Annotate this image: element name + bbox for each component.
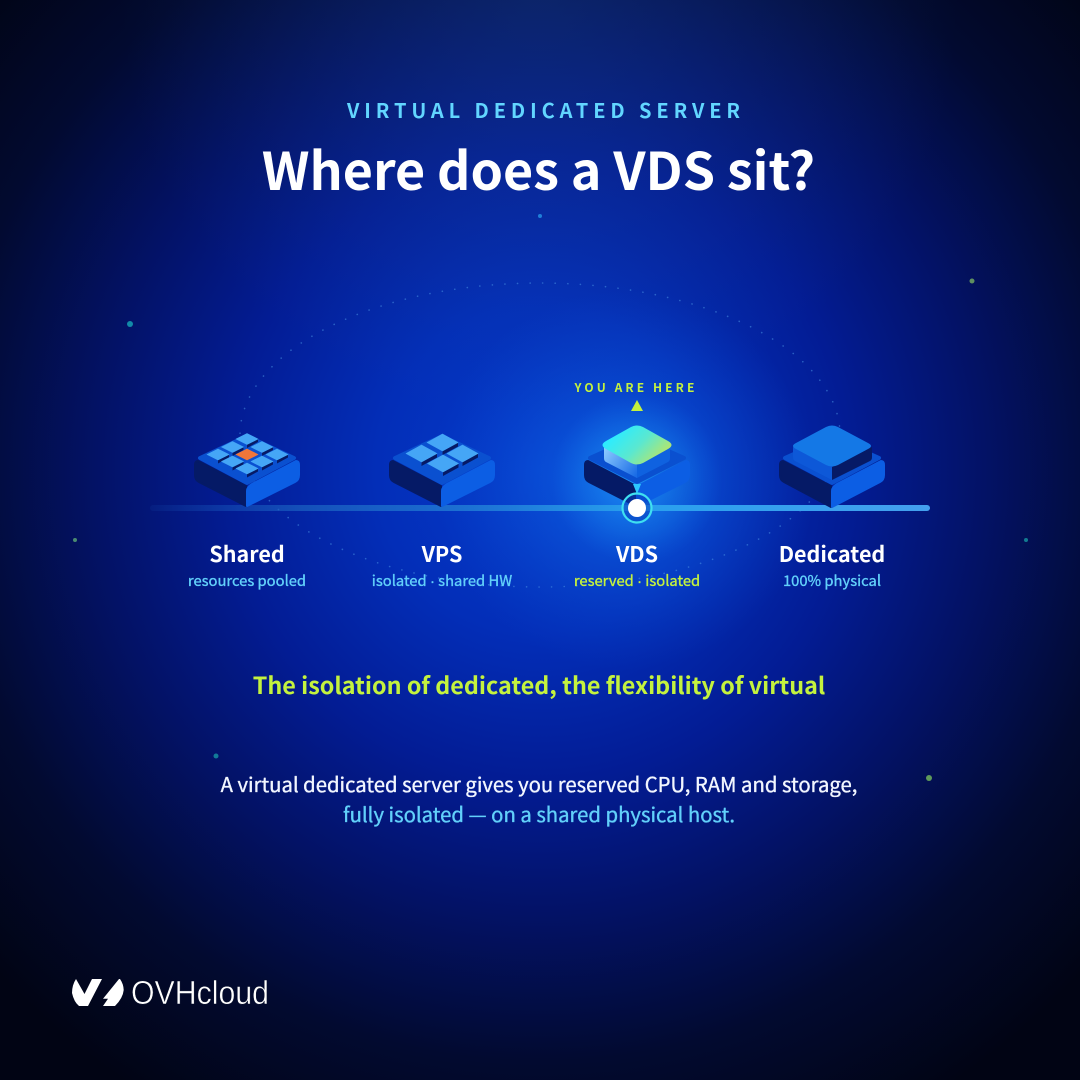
label: dedicated: 100% physical (783, 570, 881, 591)
label: shared: resources pooled (188, 570, 306, 591)
icon: dedicated server (780, 426, 884, 507)
label: shared (188, 538, 306, 591)
timeline bar (150, 505, 930, 511)
title: Where does a VDS sit? (262, 130, 815, 205)
label: dedicated: Dedicated (779, 538, 885, 569)
glowing top slab (602, 426, 672, 478)
label: dedicated (779, 538, 885, 591)
logo: OVHcloud (72, 974, 269, 1011)
decorative particles (73, 214, 1028, 781)
label: VPS: isolated · shared HW (372, 570, 512, 591)
description: A virtual dedicated server gives you reserved CPU, RAM and storage, (221, 768, 857, 798)
eyebrow heading: VIRTUAL DEDICATED SERVER (346, 95, 745, 124)
icon: logo mark (72, 979, 124, 1006)
label: VDS: VDS (615, 538, 658, 569)
label: VDS (574, 538, 700, 591)
timeline marker (622, 494, 652, 522)
tagline: The isolation of dedicated, the flexibility of virtual (253, 667, 825, 701)
icon: VPS server (390, 434, 494, 506)
callout: you are here (574, 379, 697, 411)
callout: you are here: YOU ARE HERE (574, 379, 697, 396)
description (221, 768, 857, 828)
label: VPS (372, 538, 512, 591)
icon: shared server (195, 434, 299, 506)
description: fully isolated — on a shared physical host. (343, 798, 735, 828)
icon: VDS server highlighted (585, 426, 689, 506)
label: VPS: VPS (421, 538, 462, 569)
logo: OVHcloud: OVHcloud (131, 974, 269, 1011)
label: shared: Shared (209, 538, 285, 569)
label: VDS: reserved · isolated (574, 570, 700, 591)
tiles: pooled resources (207, 434, 288, 478)
tiles: isolated partitions (406, 434, 478, 476)
dotted orbit arc (240, 283, 840, 587)
